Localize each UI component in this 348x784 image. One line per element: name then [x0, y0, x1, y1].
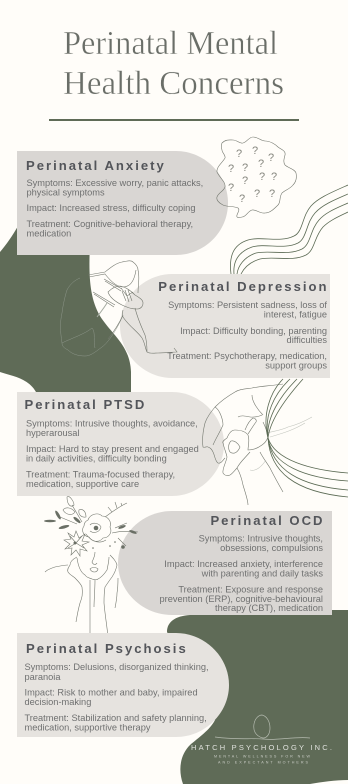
heading: depression: Perinatal Depression — [158, 279, 328, 294]
icon: thought cloud with question marks: ? — [236, 148, 242, 160]
text: depression details: Treatment: Psychotherapy, medication, — [167, 351, 327, 361]
text: anxiety details: physical symptoms — [26, 188, 105, 198]
icon: thought cloud with question marks: ? — [242, 162, 248, 174]
text: depression details: Impact: Difficulty bonding, parenting — [180, 326, 327, 336]
text: psychosis details: Impact: Risk to mother and baby, impaired — [24, 688, 198, 698]
text: psychosis details: decision-making — [24, 697, 91, 707]
text: psychosis details: paranoia — [24, 672, 61, 682]
text: ocd details: Treatment: Exposure and response — [178, 584, 323, 594]
icon: thought cloud with question marks: ? — [254, 188, 260, 200]
panel: perinatal depression — [120, 274, 330, 378]
green blob: lower right — [167, 610, 348, 784]
panel: perinatal ocd — [118, 511, 332, 615]
wavy lines lower right — [266, 379, 348, 497]
green blob: upper left — [0, 226, 131, 392]
text: psychosis details: Treatment: Stabilization and safety planning, — [24, 713, 207, 723]
icon: egg outline — [215, 715, 310, 739]
text: psychosis details — [24, 662, 209, 732]
text: anxiety details — [26, 178, 203, 238]
logo name: HATCH PSYCHOLOGY INC. — [191, 743, 332, 752]
flower crown — [60, 497, 138, 556]
icon: thought cloud with question marks: ? — [271, 171, 277, 183]
heading: anxiety: Perinatal Anxiety — [26, 158, 166, 173]
icon: thought cloud with question marks: ? — [269, 188, 275, 200]
icon: thought cloud with question marks: ? — [268, 152, 274, 164]
text: depression details: interest, fatigue — [264, 310, 327, 320]
icon: thought cloud with question marks: ? — [242, 175, 248, 187]
text: ocd details: with parenting and daily tasks — [201, 568, 323, 578]
text: ptsd details: Impact: Hard to stay present and engaged — [26, 444, 199, 454]
panel: perinatal ptsd — [17, 392, 224, 496]
text: ptsd details: hyperarousal — [26, 428, 79, 438]
icon: thought cloud with question marks: ? — [228, 182, 234, 194]
illustration: holding hands line art — [203, 384, 312, 505]
text: depression details: support groups — [265, 360, 327, 370]
text: ptsd details: Symptoms: Intrusive thoughts, avoidance, — [26, 418, 198, 428]
illustration: woman with flowers line art — [44, 497, 138, 637]
logo: hatch psychology — [191, 715, 332, 764]
text: ocd details: prevention (ERP), cognitive-behavioural — [159, 594, 323, 604]
text: depression details — [167, 300, 327, 370]
icon: thought cloud with question marks: ? — [239, 193, 245, 205]
text: ocd details — [159, 534, 323, 613]
heading: ptsd: Perinatal PTSD — [24, 397, 146, 412]
face — [77, 557, 109, 580]
text: ptsd details: medication, supportive care — [26, 479, 139, 489]
text: ocd details: obsessions, compulsions — [220, 543, 323, 553]
text: anxiety details: medication — [26, 228, 71, 238]
panel: perinatal anxiety — [17, 151, 228, 255]
title: Perinatal Mental — [63, 25, 278, 62]
text: depression details: Symptoms: Persistent sadness, loss of — [168, 300, 327, 310]
text: depression details: difficulties — [287, 335, 327, 345]
title: Health Concerns — [63, 65, 284, 102]
illustration: seated figure line art — [60, 261, 177, 356]
text: anxiety details: Symptoms: Excessive worry, panic attacks, — [26, 178, 203, 188]
icon: thought cloud with question marks: ? — [258, 158, 264, 170]
title — [63, 25, 284, 102]
heading: psychosis: Perinatal Psychosis — [26, 641, 188, 656]
text: ptsd details: Treatment: Trauma-focused therapy, — [26, 470, 175, 480]
text: ocd details: Symptoms: Intrusive thoughts, — [199, 534, 323, 544]
text: psychosis details: Symptoms: Delusions, disorganized thinking, — [24, 662, 209, 672]
text: anxiety details: Impact: Increased stress, difficulty coping — [26, 203, 195, 213]
text: ptsd details — [26, 418, 199, 489]
logo tagline: MENTAL WELLNESS FOR NEW — [214, 754, 311, 758]
panel: perinatal psychosis — [17, 633, 229, 737]
text: ocd details: Impact: Increased anxiety, interference — [164, 559, 323, 569]
icon: thought cloud with question marks: ? — [259, 171, 265, 183]
logo: hatch psychology: AND EXPECTANT MOTHERS — [218, 760, 309, 764]
icon: thought cloud with question marks: ? — [252, 145, 258, 157]
heading: ocd: Perinatal OCD — [210, 513, 324, 528]
icon: thought cloud with question marks: ? — [228, 163, 234, 175]
wavy lines top right — [230, 185, 348, 274]
icon: thought cloud with question marks — [217, 137, 296, 218]
text: ocd details: therapy (CBT), medication — [215, 603, 323, 613]
text: psychosis details: medication, supportive therapy — [24, 722, 151, 732]
text: anxiety details: Treatment: Cognitive-behavioral therapy, — [26, 219, 193, 229]
text: ptsd details: in daily activities, difficulty bonding — [26, 454, 167, 464]
